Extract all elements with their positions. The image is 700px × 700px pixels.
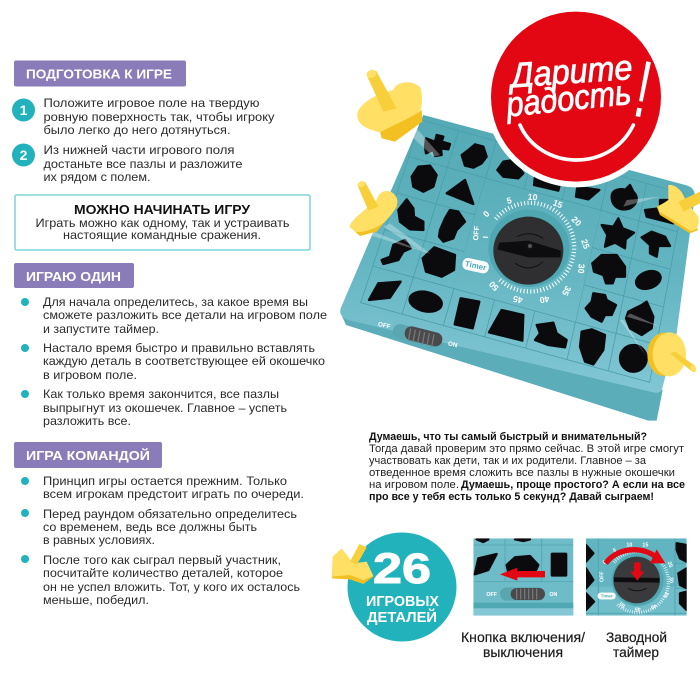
timer dial: 30 bbox=[576, 263, 587, 274]
caption: game pieces: ИГРОВЫХ bbox=[366, 594, 439, 610]
heading: preparation: ПОДГОТОВКА К ИГРЕ bbox=[26, 66, 172, 82]
power switch bbox=[377, 321, 458, 349]
badge wordmark: Дарите bbox=[506, 49, 634, 96]
heading: preparation bbox=[14, 60, 186, 86]
photo: power switch: ON bbox=[549, 592, 557, 598]
badge: 26 game pieces bbox=[332, 532, 456, 642]
badge wordmark bbox=[504, 44, 658, 134]
timer dial: OFF bbox=[471, 225, 481, 241]
caption: power button bbox=[461, 630, 585, 660]
callout: start the game: настоящие командные сражения. bbox=[63, 228, 261, 242]
timer dial: 35 bbox=[560, 284, 573, 297]
heading: team play bbox=[14, 442, 162, 468]
badge: give joy bbox=[485, 6, 667, 187]
team rule 3: меньше, победил. bbox=[43, 593, 149, 607]
step 2 text: Из нижней части игрового поля bbox=[44, 143, 234, 157]
solo rule 2: Настало время быстро и правильно вставлять bbox=[43, 341, 315, 355]
solo rule 3: разложить все. bbox=[43, 414, 131, 428]
photo: wind-up timer: 15 bbox=[642, 543, 648, 549]
solo rule 1: и запустите таймер. bbox=[43, 322, 159, 336]
timer dial: 20 bbox=[570, 214, 584, 228]
callout: start the game bbox=[15, 195, 310, 250]
description paragraph: на игровом поле. bbox=[369, 479, 459, 491]
heading: team play: ИГРА КОМАНДОЙ bbox=[26, 448, 150, 463]
puzzle piece top left bbox=[357, 68, 422, 142]
solo rule 2 bbox=[21, 341, 325, 382]
step 1 text: ровную поверхность так, чтобы игроку bbox=[44, 110, 275, 124]
team rule 2: со временем, ведь все должны быть bbox=[43, 520, 257, 534]
power switch: ON bbox=[447, 340, 458, 349]
step 2 text bbox=[44, 143, 243, 184]
photo: wind-up timer: 45 bbox=[635, 606, 641, 612]
description paragraph: Думаешь, проще простого? А если на все bbox=[461, 479, 685, 491]
panel: team play bbox=[14, 442, 304, 607]
panel: solo play bbox=[14, 263, 327, 428]
step 1 number bbox=[12, 98, 35, 122]
photo: power switch: OFF bbox=[486, 592, 498, 598]
photo: wind-up timer: 35 bbox=[661, 590, 670, 599]
callout: start the game: МОЖНО НАЧИНАТЬ ИГРУ bbox=[74, 202, 251, 217]
timer dial: 50 bbox=[487, 279, 501, 293]
team rule 2: Перед раундом обязательно определитесь bbox=[43, 507, 297, 521]
step 2 text: достаньте все пазлы и разложите bbox=[44, 157, 243, 171]
solo rule 1: Для начала определитесь, за какое время вы bbox=[43, 295, 308, 309]
puzzle piece lower right bbox=[647, 332, 697, 376]
timer dial: 25 bbox=[579, 238, 592, 250]
photo: wind-up timer: 30 bbox=[667, 577, 673, 583]
team rule 1: всем игрокам предстоит играть по очереди. bbox=[43, 487, 304, 501]
team rule 1: Принцип игры остается прежним. Только bbox=[43, 474, 287, 488]
heading: solo play: ИГРАЮ ОДИН bbox=[26, 269, 121, 284]
team rule 3: он не успел вложить. Тот, у кого их осталось bbox=[43, 580, 300, 594]
timer label bbox=[461, 257, 490, 274]
puzzle piece right bbox=[657, 185, 700, 233]
caption: game pieces: ДЕТАЛЕЙ bbox=[367, 608, 437, 626]
badge wordmark: ! bbox=[629, 44, 658, 134]
solo rule 2: в игровом поле. bbox=[43, 368, 137, 382]
caption: game pieces bbox=[366, 594, 439, 626]
description paragraph: про все у тебя есть только 5 секунд? Давай сыграем! bbox=[369, 491, 654, 503]
photo: wind-up timer: 10 bbox=[626, 543, 632, 549]
step 1 text: было легко до него дотянуться. bbox=[44, 123, 230, 137]
timer dial: 15 bbox=[551, 197, 564, 210]
badge smile bbox=[520, 125, 633, 160]
photo: wind-up timer: OFF bbox=[599, 571, 605, 582]
number 26: 26 bbox=[373, 545, 431, 593]
timer dial: 0 bbox=[481, 209, 492, 219]
photo: wind-up timer: 5 bbox=[613, 548, 617, 554]
light beams bbox=[370, 125, 660, 357]
puzzle slots bbox=[369, 135, 673, 372]
team rule 3: После того как сыграл первый участник, bbox=[43, 553, 281, 567]
photo: wind-up timer: 25 bbox=[666, 561, 673, 568]
solo rule 1: сможете разложить все детали на игровом поле bbox=[43, 308, 327, 322]
description paragraph: отведенное время сложить все пазлы в нужные окошечки bbox=[369, 467, 675, 479]
timer dial: 5 bbox=[506, 195, 513, 206]
badge wordmark: радость bbox=[504, 74, 633, 125]
step 2 number bbox=[12, 144, 35, 166]
heading: solo play bbox=[14, 263, 134, 288]
description paragraph bbox=[369, 431, 685, 503]
solo rule 3: выпрыгнут из окошечек. Главное – успеть bbox=[43, 401, 287, 415]
photo: power switch bbox=[473, 538, 573, 616]
timer dial: 40 bbox=[539, 294, 550, 305]
puzzle piece middle left bbox=[349, 180, 397, 236]
photo: wind-up timer bbox=[586, 538, 687, 616]
step 1 number: 1 bbox=[20, 102, 28, 118]
step 1 text bbox=[44, 96, 275, 137]
icon: yellow puzzle piece bbox=[332, 544, 373, 584]
photo: wind-up timer: 50 bbox=[618, 600, 627, 609]
photo: wind-up timer: 40 bbox=[650, 602, 657, 610]
board grid bbox=[361, 120, 684, 382]
step 1 text: Положите игровое поле на твердую bbox=[44, 96, 260, 110]
solo rule 3: Как только время закончится, все пазлы bbox=[43, 387, 279, 401]
description paragraph: Тогда давай проверим это прямо сейчас. В этой игре смогут bbox=[369, 443, 684, 455]
caption: power button: выключения bbox=[483, 645, 563, 660]
timer dial bbox=[471, 192, 592, 305]
description paragraph: Думаешь, что ты самый быстрый и внимательный? bbox=[369, 431, 647, 443]
timer label: Timer bbox=[464, 259, 487, 272]
description paragraph: участвовать как дети, так и их родители. Главное – за bbox=[369, 455, 646, 467]
team rule 3 bbox=[21, 553, 300, 607]
team rule 1 bbox=[21, 474, 304, 501]
game board illustration bbox=[340, 6, 700, 421]
solo rule 3 bbox=[21, 387, 287, 428]
caption: wind-up timer bbox=[606, 630, 667, 660]
timer dial: I bbox=[481, 236, 490, 239]
solo rule 2: каждую деталь в соответствующее ей окошечко bbox=[43, 354, 325, 368]
board body bbox=[340, 115, 695, 421]
panel: preparation bbox=[12, 60, 275, 184]
timer dial: 45 bbox=[512, 294, 523, 305]
step 2 number: 2 bbox=[20, 147, 28, 163]
step 2 text: их рядом с полем. bbox=[44, 170, 150, 184]
timer dial: 10 bbox=[527, 192, 538, 202]
solo rule 1 bbox=[21, 295, 327, 336]
photo: wind-up timer: Timer bbox=[601, 594, 613, 599]
callout: start the game: Играть можно как одному, так и устраивать bbox=[36, 216, 290, 230]
team rule 2 bbox=[21, 507, 297, 547]
photo: wind-up timer: 0 bbox=[602, 559, 608, 566]
caption: wind-up timer: Заводной bbox=[606, 630, 667, 645]
team rule 3: посчитайте количество деталей, которое bbox=[43, 566, 283, 580]
caption: wind-up timer: таймер bbox=[613, 645, 659, 660]
caption: power button: Кнопка включения/ bbox=[461, 630, 585, 645]
team rule 2: в равных условиях. bbox=[43, 533, 155, 547]
power switch: OFF bbox=[377, 321, 391, 331]
